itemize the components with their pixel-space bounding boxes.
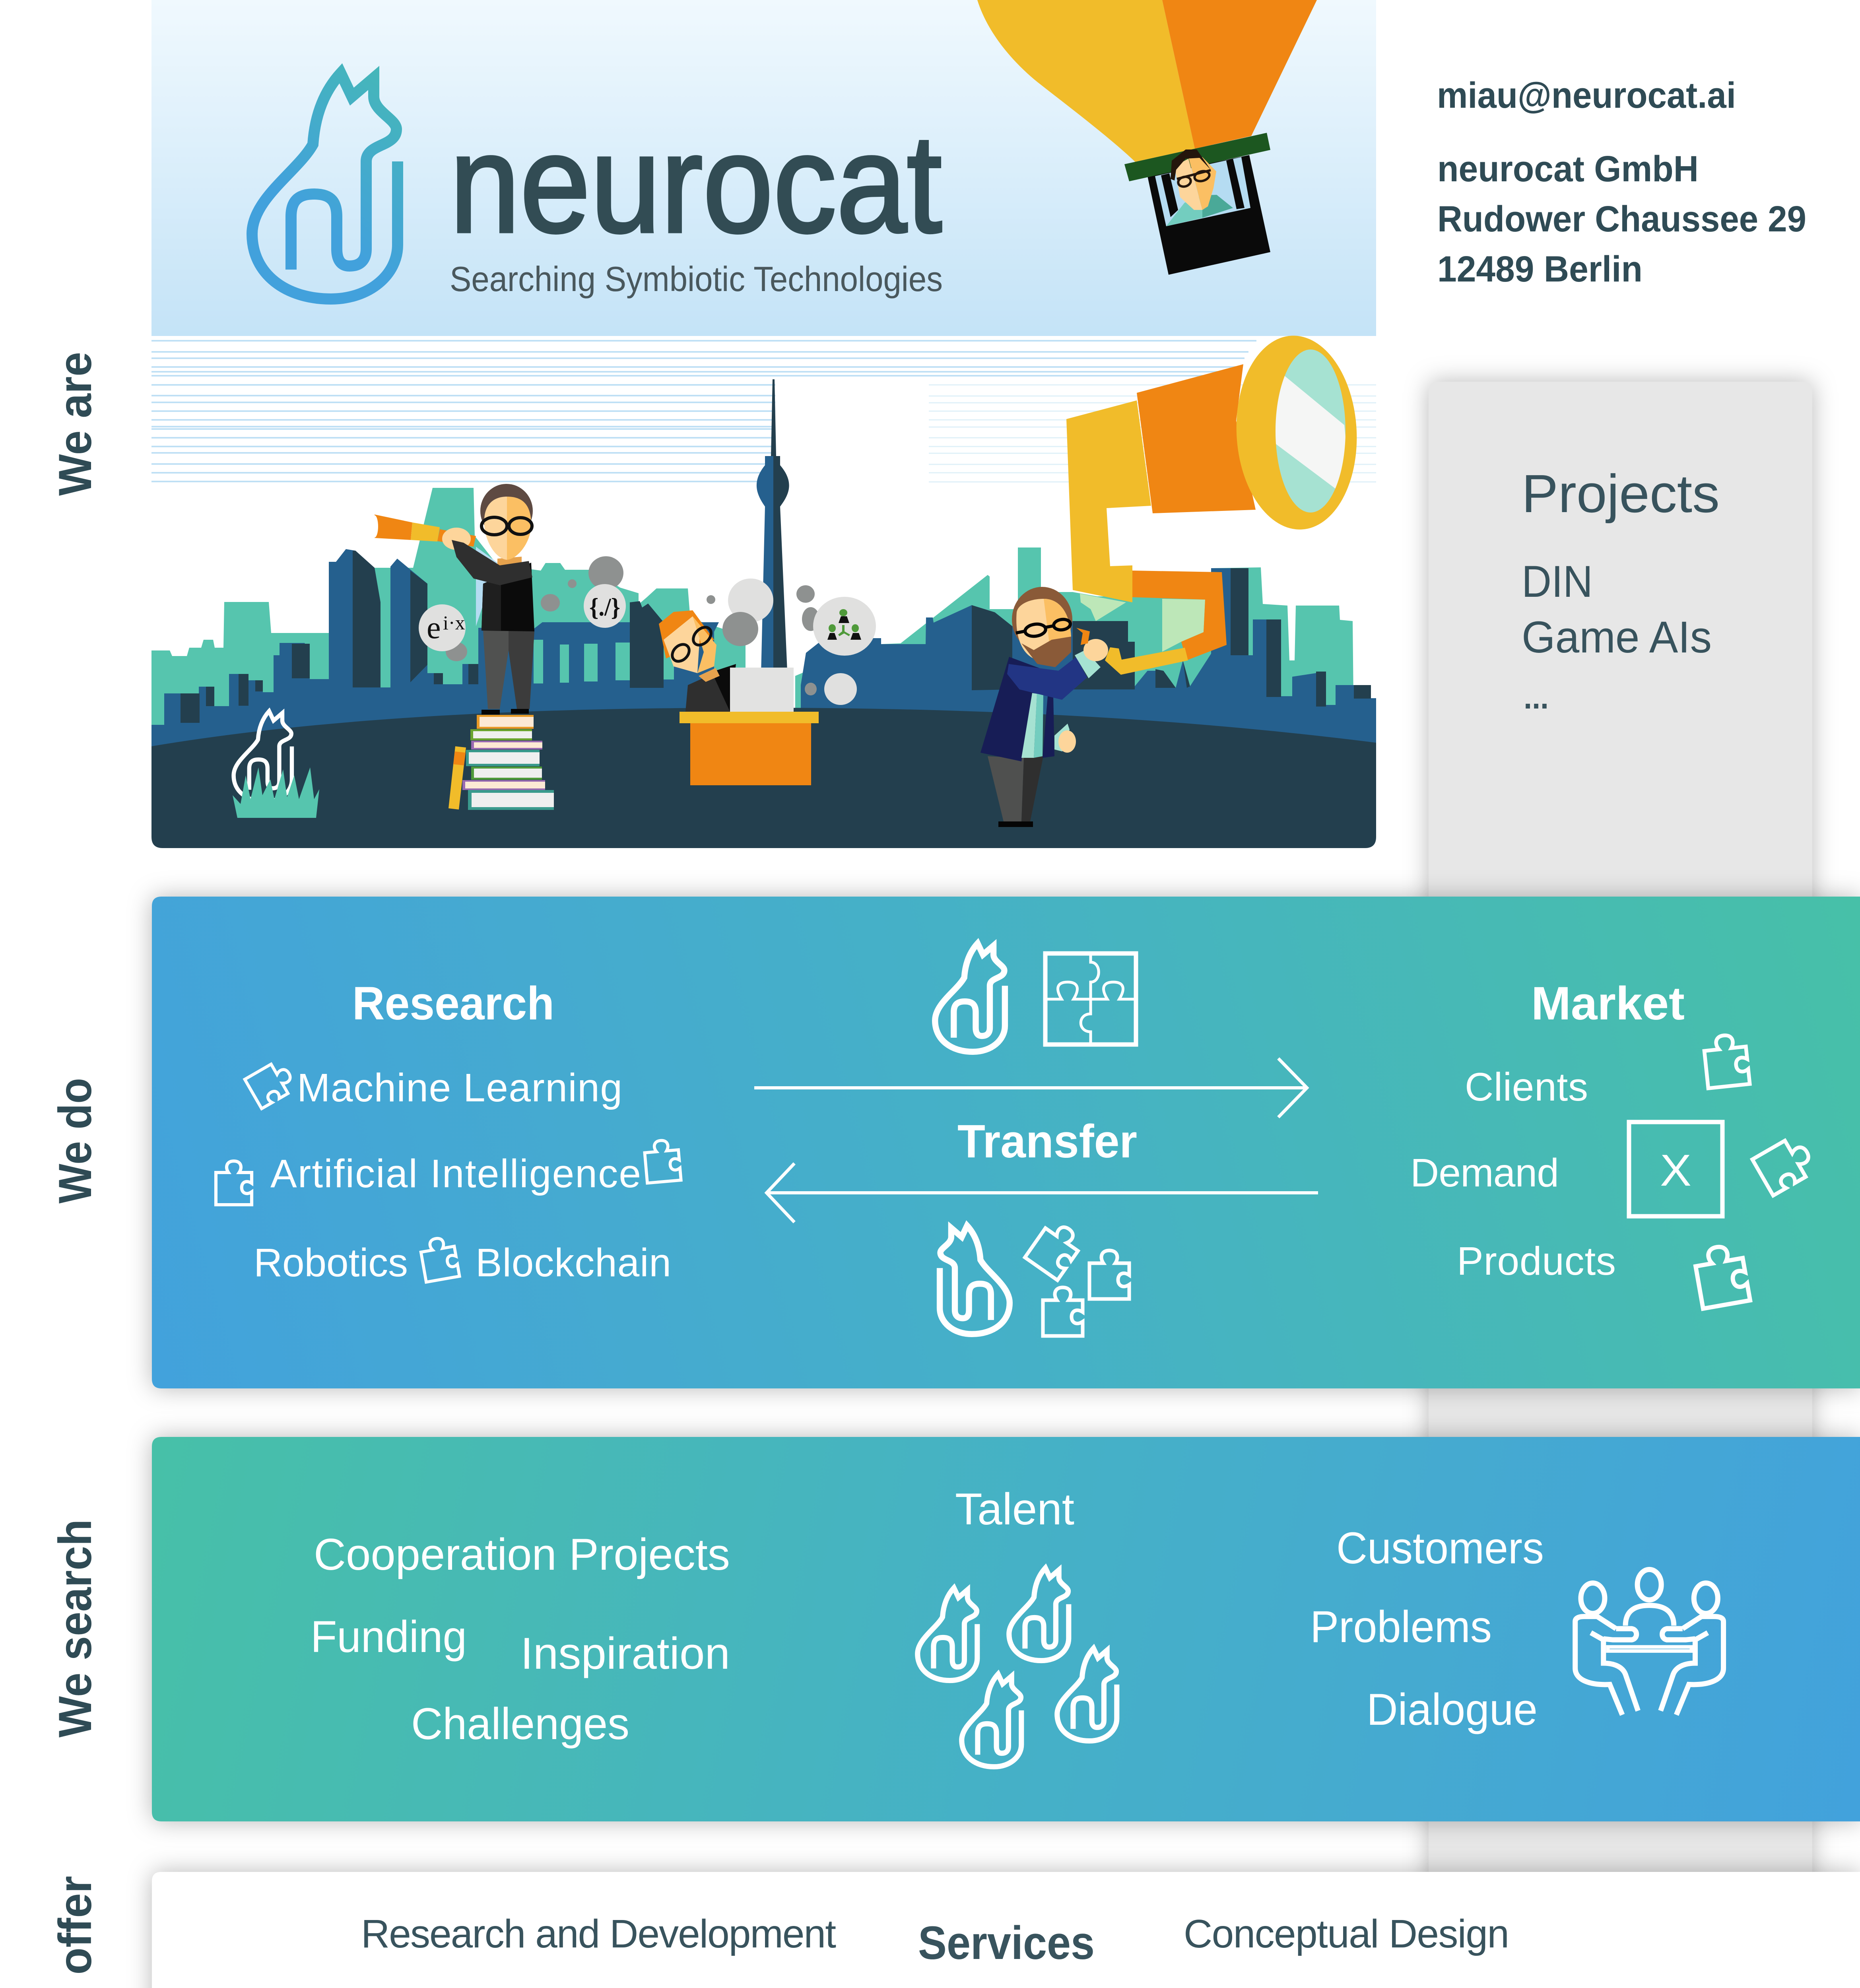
- illustration: city scene: [151, 332, 1376, 848]
- icon: cat with loose puzzle pieces: [940, 1218, 1129, 1336]
- projects heading: Projects: [1522, 464, 1720, 524]
- contact details: miau@neurocat.ai: [1437, 75, 1736, 116]
- icon: cat in grass: [233, 711, 319, 818]
- blue buildings: [151, 549, 1376, 755]
- logo wordmark: neurocat: [450, 105, 942, 262]
- talent label: Talent: [955, 1484, 1074, 1534]
- arrow: research to market: [754, 1058, 1307, 1117]
- panel: we do: [152, 897, 1860, 1388]
- thought bubbles: {./}: [589, 593, 620, 621]
- thought bubbles: i·x: [443, 612, 465, 634]
- left text block: Challenges: [411, 1699, 629, 1749]
- icon: unknown X box: [1629, 1122, 1722, 1216]
- projects list: ...: [1522, 668, 1551, 718]
- left text block: Inspiration: [520, 1629, 730, 1678]
- left text block: Cooperation Projects: [314, 1530, 730, 1579]
- dark building shades: [181, 551, 1371, 723]
- icon: cat with solved puzzle: [935, 944, 1136, 1052]
- services list: Conceptual Design: [1184, 1912, 1509, 1956]
- services heading: Services: [918, 1917, 1095, 1969]
- header: sky panel: [151, 0, 1376, 336]
- left text block: Funding: [311, 1612, 467, 1662]
- research topics: Machine Learning: [297, 1066, 622, 1110]
- illustration: hot air balloon with person: [977, 0, 1317, 275]
- transfer heading: Transfer: [957, 1115, 1137, 1168]
- services list: Research and Development: [361, 1912, 836, 1956]
- TV tower: [757, 379, 789, 708]
- thought bubbles: e: [427, 610, 441, 645]
- contact details: Rudower Chaussee 29: [1437, 199, 1806, 239]
- ground: [151, 708, 1376, 848]
- contact details: 12489 Berlin: [1437, 249, 1643, 289]
- illustration: person at desk: [659, 610, 819, 785]
- panel: we search: [152, 1437, 1860, 1821]
- market heading: Market: [1531, 977, 1685, 1030]
- market topics: Products: [1457, 1239, 1616, 1283]
- panel: projects and upgrade perception column: [1429, 382, 1812, 1988]
- arrow: market to research: [767, 1163, 1318, 1222]
- market topics: [1410, 1065, 1616, 1283]
- illustration: large periscope telescope: [1066, 332, 1362, 660]
- label: we are: We are: [49, 352, 101, 496]
- projects list: Game AIs: [1522, 612, 1712, 662]
- right text block: Customers: [1336, 1523, 1544, 1573]
- projects list: [1522, 557, 1712, 718]
- panel: we offer: [152, 1872, 1860, 1988]
- market topics: Demand: [1410, 1151, 1559, 1195]
- tagline: Searching Symbiotic Technologies: [450, 259, 943, 299]
- research heading: Research: [352, 977, 554, 1030]
- left text block: [311, 1530, 730, 1749]
- illustration: person with telescope on books: [371, 484, 554, 810]
- research topics: Blockchain: [476, 1241, 671, 1285]
- research topics: [254, 1066, 671, 1285]
- icon: puzzle pieces around research topics: [216, 1059, 681, 1282]
- icon: neurocat logo cat: [252, 73, 398, 299]
- services list: [361, 1912, 1509, 1988]
- teal skyline: [151, 488, 1353, 736]
- stack of books: [448, 715, 554, 810]
- icon: people at table: [1575, 1569, 1724, 1715]
- projects list: DIN: [1522, 557, 1593, 606]
- icon: group of cats: [918, 1568, 1117, 1767]
- teal gate columns: [534, 632, 674, 683]
- contact details: [1437, 75, 1806, 289]
- right text block: Problems: [1310, 1602, 1492, 1652]
- label: we do: We do: [49, 1078, 101, 1204]
- icon: unknown X box: X: [1660, 1145, 1691, 1195]
- research topics: Artificial Intelligence: [270, 1151, 641, 1196]
- right text block: [1310, 1523, 1544, 1734]
- icon: puzzle pieces around market topics: [1693, 1033, 1817, 1309]
- illustration: person at eyepiece: [980, 587, 1188, 827]
- contact details: neurocat GmbH: [1437, 149, 1699, 189]
- thought bubbles: [419, 556, 876, 705]
- label: we search: We search: [49, 1519, 101, 1738]
- market topics: Clients: [1465, 1065, 1588, 1109]
- right text block: Dialogue: [1367, 1685, 1538, 1734]
- research topics: Robotics: [254, 1241, 408, 1285]
